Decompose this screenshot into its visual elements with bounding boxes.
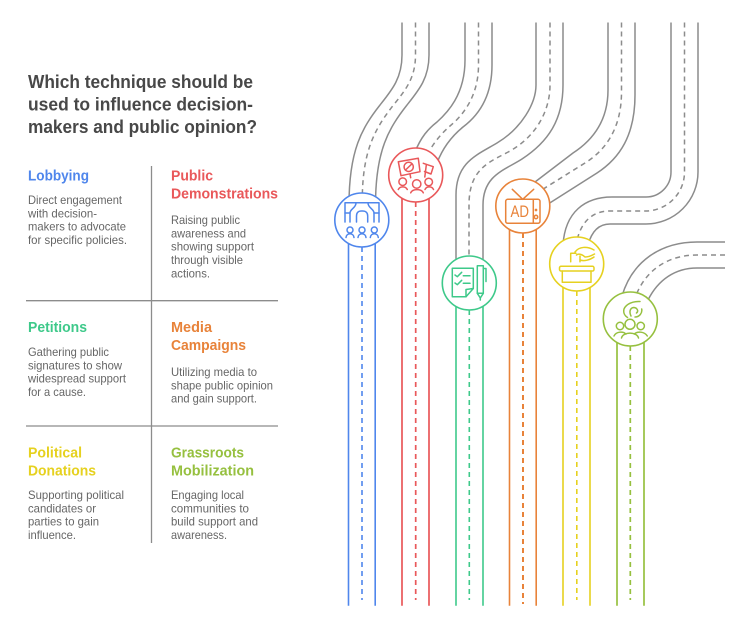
panel: political donations: candidates or bbox=[28, 502, 96, 515]
panel: political donations: Donations bbox=[28, 464, 96, 480]
icon: community with hands bbox=[614, 301, 647, 338]
panel: grassroots mobilization: awareness. bbox=[171, 529, 227, 542]
panel: media campaigns: Utilizing media to bbox=[171, 366, 257, 379]
panel: media campaigns: shape public opinion bbox=[171, 379, 273, 392]
panel: political donations: Political bbox=[28, 446, 82, 462]
panel: lobbying: Direct engagement bbox=[28, 194, 123, 207]
icon: television with AD bbox=[506, 189, 540, 223]
panel: grassroots mobilization: communities to bbox=[171, 502, 249, 515]
road: media campaigns (orange) bbox=[496, 22, 635, 606]
panel: media campaigns: Campaigns bbox=[171, 338, 246, 354]
road: public demonstrations (red) bbox=[389, 22, 492, 606]
panel: public demonstrations: Demonstrations bbox=[171, 186, 278, 202]
panel: public demonstrations: Public bbox=[171, 168, 213, 184]
panel: lobbying: with decision- bbox=[27, 207, 97, 220]
icon: television with AD: AD bbox=[510, 203, 529, 221]
title: Which technique should be bbox=[28, 72, 253, 92]
panel: political donations: Supporting political bbox=[28, 489, 124, 502]
panel: petitions: widespread support bbox=[27, 373, 127, 386]
panel: grassroots mobilization: Engaging local bbox=[171, 489, 244, 502]
panel: petitions: signatures to show bbox=[28, 359, 123, 372]
panel: political donations: parties to gain bbox=[28, 516, 99, 529]
road: grassroots mobilization (lime) bbox=[603, 242, 725, 606]
panel: political donations bbox=[28, 446, 124, 542]
road: petitions (green) bbox=[442, 22, 563, 606]
title bbox=[28, 72, 257, 137]
panel: grassroots mobilization: Grassroots bbox=[171, 446, 244, 462]
panel: public demonstrations bbox=[171, 168, 278, 280]
panel: grassroots mobilization: build support and bbox=[171, 516, 258, 529]
panel: petitions bbox=[27, 320, 127, 399]
icon: ballot box with hand bbox=[560, 247, 594, 282]
road: political donations (yellow) bbox=[550, 22, 698, 606]
title: makers and public opinion? bbox=[28, 117, 257, 137]
icon: lobbying building and people bbox=[345, 203, 379, 238]
panel: grassroots mobilization bbox=[171, 446, 258, 542]
panel: public demonstrations: through visible bbox=[171, 254, 243, 267]
panel: grassroots mobilization: Mobilization bbox=[171, 464, 254, 480]
title: used to influence decision- bbox=[28, 94, 253, 114]
icon: petition sheet and pen bbox=[452, 266, 486, 300]
panel: petitions: Gathering public bbox=[28, 346, 109, 359]
panel: lobbying: for specific policies. bbox=[28, 234, 127, 247]
panel: petitions: Petitions bbox=[28, 320, 87, 336]
panel: lobbying: Lobbying bbox=[28, 168, 89, 184]
panel: political donations: influence. bbox=[28, 529, 76, 542]
panel: public demonstrations: awareness and bbox=[171, 227, 246, 240]
road: lobbying (blue) bbox=[335, 22, 429, 606]
panel: public demonstrations: Raising public bbox=[171, 214, 240, 227]
panel: media campaigns: Media bbox=[171, 320, 213, 336]
panel: lobbying: makers to advocate bbox=[28, 221, 126, 234]
panel: public demonstrations: showing support bbox=[171, 241, 255, 254]
panel: lobbying bbox=[27, 168, 127, 247]
panel: public demonstrations: actions. bbox=[171, 267, 210, 280]
panel: media campaigns bbox=[171, 320, 273, 406]
panel: media campaigns: and gain support. bbox=[171, 393, 257, 406]
panel: petitions: for a cause. bbox=[28, 386, 86, 399]
icon: protest signs and crowd bbox=[398, 158, 434, 193]
